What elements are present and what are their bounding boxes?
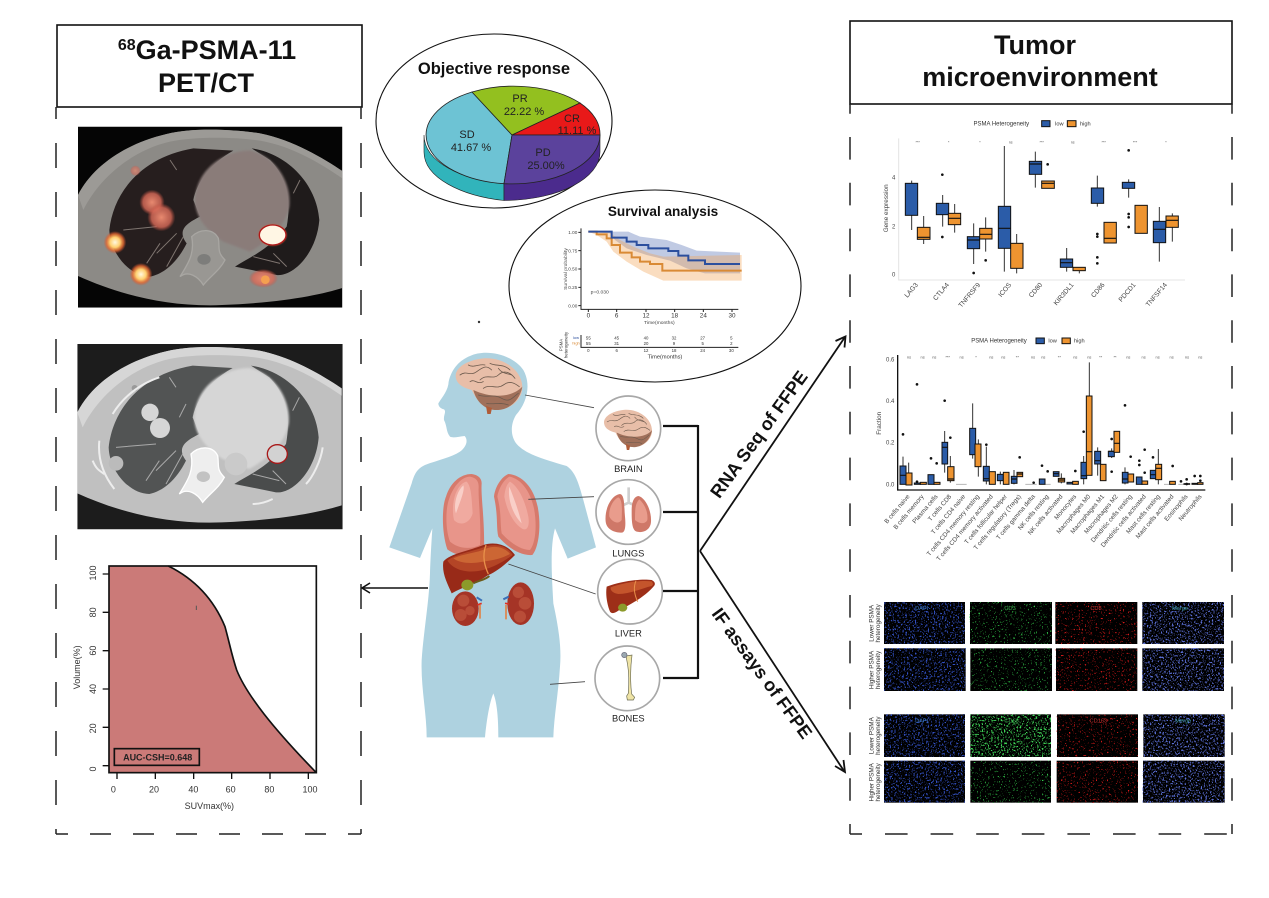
chart: immune cell fraction boxplots: 0.6 [886,357,895,363]
icon: brain [596,396,661,461]
chart: 3D pie: 11.11 % [558,125,597,137]
chart: immune cell fraction boxplots: Monocytes [1053,493,1078,521]
heading: tumor microenvironment [850,21,1232,104]
chart: immune cell fraction boxplots: T cells follicular helper [963,493,1009,546]
figure: immunofluorescence panels: Lower PSMA [868,604,875,642]
chart: gene expression boxplots: low [1055,122,1064,128]
connector lines from body to organ icons [508,395,596,684]
image: fused PET/CT axial slice [78,127,342,308]
chart: cumulative SUV histogram: 60 [88,646,98,656]
figure: immunofluorescence panels: Lower PSMA [868,716,875,754]
heading: tumor microenvironment: microenvironment [922,62,1158,92]
chart: gene expression boxplots: * [979,140,981,144]
chart: immune cell fraction boxplots: T cells CD4 memory resting [926,493,982,558]
chart: immune cell fraction boxplots: ns [1087,355,1091,360]
chart: gene expression boxplots: high [1080,122,1091,128]
chart: immune cell fraction boxplots: 0.4 [886,399,895,405]
chart: immune cell fraction boxplots: ns [1170,355,1174,360]
chart: gene expression boxplots: PDCD1 [1118,282,1138,304]
chart: immune cell fraction boxplots: ns [1185,355,1189,360]
chart: Kaplan-Meier curves: 1.00 [568,230,578,235]
chart: immune cell fraction boxplots: ns [921,355,925,360]
chart: cumulative SUV histogram: 0 [88,766,98,771]
chart: gene expression boxplots: ICOS [997,281,1014,299]
chart: gene expression boxplots [883,121,1185,309]
chart: immune cell fraction boxplots: ns [1142,355,1146,360]
arrow: to cumulative histogram [362,583,428,593]
chart: immune cell fraction boxplots: ** [1099,355,1103,360]
figure: immunofluorescence panels: CD163 [1090,719,1107,725]
chart: immune cell fraction boxplots: ** [1016,355,1019,360]
label: BRAIN: BRAIN [614,464,643,474]
chart: immune cell fraction boxplots: Eosinophils [1163,493,1190,523]
chart: immune cell fraction boxplots: Fraction [876,411,883,435]
label: LUNGS: LUNGS [612,549,644,559]
chart: immune cell fraction boxplots: * [975,355,977,360]
label: RNA Seq of FFPE: RNA Seq of FFPE [706,367,812,502]
chart: cumulative SUV histogram: 20 [88,723,98,733]
figure: immunofluorescence panels: Merge [1175,719,1191,725]
chart: gene expression boxplots: 4 [892,176,896,182]
chart: Kaplan-Meier curves: 24 [700,313,707,320]
chart: Kaplan-Meier curves: 24 [700,348,706,353]
figure: immunofluorescence panels: heterogeneity [875,650,882,689]
figure: immunofluorescence panels: DAPI [915,606,929,612]
chart: immune cell fraction boxplots: Dendritic cells activated [1100,493,1148,549]
chart: gene expression boxplots: TNFRSF9 [958,282,982,309]
arrow: to IF assays [700,551,845,772]
chart: cumulative SUV histogram: 80 [264,784,274,794]
label: LIVER: LIVER [615,628,642,638]
figure: immunofluorescence panels: heterogeneity [875,716,882,755]
chart: 3D pie: CR [564,113,580,125]
chart: immune cell fraction boxplots: ns [1126,355,1130,360]
figure: immunofluorescence panels: CD3 [1004,606,1016,612]
organ: brain in head [456,358,522,414]
chart: immune cell fraction boxplots: ns [989,355,993,360]
chart: gene expression boxplots: *** [1040,140,1044,144]
panel: survival analysis [509,190,801,382]
chart: Kaplan-Meier curves: 6 [615,313,619,320]
chart: Kaplan-Meier curves: 45 [614,335,620,340]
chart: Kaplan-Meier curves: 12 [642,313,650,320]
chart: immune cell fraction boxplots: Plasma cells [911,493,940,525]
chart: Kaplan-Meier curves: 30 [729,348,734,353]
chart: cumulative SUV histogram: AUC-CSH=0.648 [123,753,192,763]
organ: liver and gallbladder [443,543,515,593]
chart: Kaplan-Meier curves: 0.00 [568,303,578,308]
chart: 3D pie: PD [535,147,551,159]
chart: 3D pie: PR [512,93,528,105]
label: IF assays of FFPE: IF assays of FFPE [708,604,817,743]
chart: gene expression boxplots: CD86 [1090,282,1107,299]
chart: immune cell fraction boxplots: Neutrophils [1178,493,1204,522]
chart: Kaplan-Meier curves: 40 [644,335,649,340]
figure: immunofluorescence panels: heterogeneity [875,762,882,802]
chart: immune cell fraction boxplots: Macrophages M2 [1083,493,1120,535]
figure: immunofluorescence panels: Merge [1172,606,1188,612]
figure: immunofluorescence panels: Higher PSMA [868,762,875,802]
organ: kidneys [452,582,534,626]
chart: Kaplan-Meier curves: p=0.030 [591,289,609,295]
chart: immune cell fraction boxplots: PSMA Heterogeneity [971,339,1027,345]
chart: gene expression boxplots: Gene expression [883,184,890,232]
chart: immune cell fraction boxplots: Macrophages M0 [1055,493,1092,535]
chart: Kaplan-Meier curves: 18 [672,348,677,353]
chart: Kaplan-Meier curves: 32 [672,335,677,340]
chart: immune cell fraction boxplots: Mast cells activated [1135,493,1176,540]
illustration: human body with organs [389,353,662,737]
chart: immune cell fraction boxplots: 0.2 [886,441,895,447]
chart: Kaplan-Meier curves: 5 [701,341,704,346]
chart: cumulative SUV histogram: 100 [88,565,98,580]
chart: gene expression boxplots: CTLA4 [932,282,951,302]
organ: lungs in body [443,474,539,555]
panel: tumor microenvironment [850,21,1232,834]
chart: Kaplan-Meier curves: Time(months) [644,320,675,326]
chart: 3D pie [424,86,600,200]
figure: immunofluorescence panels: DAPI [915,719,929,725]
chart: immune cell fraction boxplots: ns [932,355,936,360]
chart: immune cell fraction boxplots: 0.0 [886,482,895,488]
image: CT axial slice with contoured lesion [77,344,343,529]
label: BONES: BONES [612,714,645,724]
chart: immune cell fraction boxplots: Dendritic cells resting [1090,493,1134,544]
chart: gene expression boxplots: CD80 [1028,282,1044,299]
chart: immune cell fraction boxplots: ns [1198,355,1202,360]
chart: immune cell fraction boxplots: high [1074,339,1085,345]
chart: immune cell fraction boxplots: B cells naive [883,493,912,525]
chart: immune cell fraction boxplots: low [1048,339,1058,345]
chart: immune cell fraction boxplots: Mast cells resting [1125,493,1162,535]
chart: Kaplan-Meier curves: high [572,341,580,346]
chart: immune cell fraction boxplots: ns [1001,355,1005,360]
chart: Kaplan-Meier curves: low [573,335,579,340]
panel: PET/CT [56,25,362,834]
chart: gene expression boxplots: *** [1102,140,1106,144]
chart: immune cell fraction boxplots: ** [1058,355,1061,360]
icon: bone [595,646,660,711]
heading: survival analysis: Survival analysis [608,204,718,219]
chart: immune cell fraction boxplots: ns [1031,355,1035,360]
chart: Kaplan-Meier curves: 27 [700,335,706,340]
chart: Kaplan-Meier curves: 2 [730,341,733,346]
chart: cumulative SUV histogram: 0 [111,784,116,794]
icon: liver [598,559,662,624]
heading: 68Ga-PSMA-11 PET/CT: Ga-PSMA-11 [136,35,296,65]
figure: immunofluorescence panels: Higher PSMA [868,650,875,689]
heading: 68Ga-PSMA-11 PET/CT: 68 [118,37,136,54]
chart: immune cell fraction boxplots: T cells CD4 memory activated [935,493,995,563]
chart: 3D pie: 41.67 % [451,142,491,154]
chart: immune cell fraction boxplots: ns [1073,355,1077,360]
chart: Kaplan-Meier curves: 31 [614,341,620,346]
chart: immune cell fraction boxplots: Macrophages M1 [1069,493,1106,535]
arrow: to RNA-seq charts [700,336,846,551]
chart: gene expression boxplots: * [948,140,950,144]
icon: lungs [596,480,661,544]
chart: gene expression boxplots: TNFSF14 [1145,282,1169,308]
chart: cumulative SUV histogram: 40 [188,784,198,794]
chart: gene expression boxplots: ns [1009,140,1013,144]
chart: 3D pie: 25.00% [527,160,565,172]
chart: immune cell fraction boxplots: NK cells activated [1027,493,1065,536]
chart: gene expression boxplots: * [1165,140,1167,144]
chart: gene expression boxplots: KIR3DL1 [1053,282,1076,307]
heading: 68Ga-PSMA-11 PET/CT: PET/CT [158,68,255,98]
chart: immune cell fraction boxplots: ns [1041,355,1045,360]
chart: Kaplan-Meier curves: 5 [730,335,733,340]
chart: gene expression boxplots: *** [916,140,920,144]
chart: gene expression boxplots: *** [1133,140,1138,144]
heading: objective response: Objective response [418,60,570,78]
chart: immune cell fraction boxplots: B cells memory [892,493,926,531]
chart: Kaplan-Meier curves: 0.75 [568,248,578,253]
heading: tumor microenvironment: Tumor [994,30,1076,60]
chart: immune cell fraction boxplots: T cells regulatory (Tregs) [973,493,1023,552]
chart: cumulative SUV histogram: 80 [88,607,98,617]
chart: gene expression boxplots: PSMA Heterogeneity [974,122,1029,128]
panel: objective response [376,34,612,208]
chart: Kaplan-Meier curves: 6 [615,348,618,353]
chart: cumulative SUV histogram [72,565,317,811]
chart: immune cell fraction boxplots [876,338,1205,563]
chart: cumulative SUV histogram: 40 [88,684,98,694]
chart: immune cell fraction boxplots: ns [960,355,964,360]
chart: Kaplan-Meier curves: 55 [586,341,591,346]
figure: immunofluorescence panels [868,602,1225,803]
chart: cumulative SUV histogram: 100 [302,784,317,794]
chart: Kaplan-Meier curves: 0.50 [568,267,578,272]
chart: immune cell fraction boxplots: T cells CD4 naive [930,493,967,536]
chart: gene expression boxplots: LAG3 [904,282,920,299]
bracket joining organ icons [663,425,698,679]
chart: Kaplan-Meier curves: heterogeneity [564,331,569,358]
chart: Kaplan-Meier curves: 20 [644,341,649,346]
chart: Kaplan-Meier curves: 30 [728,313,736,320]
heading: 68Ga-PSMA-11 PET/CT [57,25,362,107]
chart: cumulative SUV histogram: 20 [149,784,159,794]
chart: Kaplan-Meier curves: 0 [587,313,591,320]
chart: Kaplan-Meier curves: 18 [671,313,679,320]
figure: immunofluorescence panels: CD68 [1004,719,1019,725]
chart: gene expression boxplots: 0 [892,273,896,279]
chart: immune cell fraction boxplots: ns [907,355,911,360]
chart: immune cell fraction boxplots: ** [1113,355,1117,360]
chart: Kaplan-Meier curves: Time(months) [648,354,682,360]
chart: cumulative SUV histogram: SUVmax(%) [185,801,234,811]
chart: immune cell fraction boxplots: T cells CD8 [927,493,954,523]
chart: immune cell fraction boxplots: ns [1156,355,1160,360]
chart: Kaplan-Meier curves: 9 [673,341,676,346]
figure: immunofluorescence panels: heterogeneity [875,603,882,643]
chart: Kaplan-Meier curves: 12 [644,348,649,353]
chart: Kaplan-Meier curves: 0.25 [568,285,578,290]
chart: 3D pie: 22.22 % [504,106,544,118]
figure: immunofluorescence panels: CD8 [1090,606,1102,612]
chart: immune cell fraction boxplots: T cells gamma delta [995,493,1037,541]
chart: Kaplan-Meier curves: 55 [586,335,591,340]
chart: Kaplan-Meier curves [558,228,742,360]
chart: immune cell fraction boxplots: NK cells resting [1017,493,1051,532]
chart: immune cell fraction boxplots: *** [945,355,950,360]
chart: gene expression boxplots: ns [1071,140,1075,144]
chart: Kaplan-Meier curves: 0 [587,348,590,353]
chart: 3D pie: SD [459,129,475,141]
chart: cumulative SUV histogram: Volume(%) [72,645,82,689]
chart: Kaplan-Meier curves: Survival probability [563,248,569,290]
chart: gene expression boxplots: 2 [892,225,896,231]
chart: cumulative SUV histogram: 60 [226,784,236,794]
chart: Kaplan-Meier curves: PSMA [558,339,563,351]
